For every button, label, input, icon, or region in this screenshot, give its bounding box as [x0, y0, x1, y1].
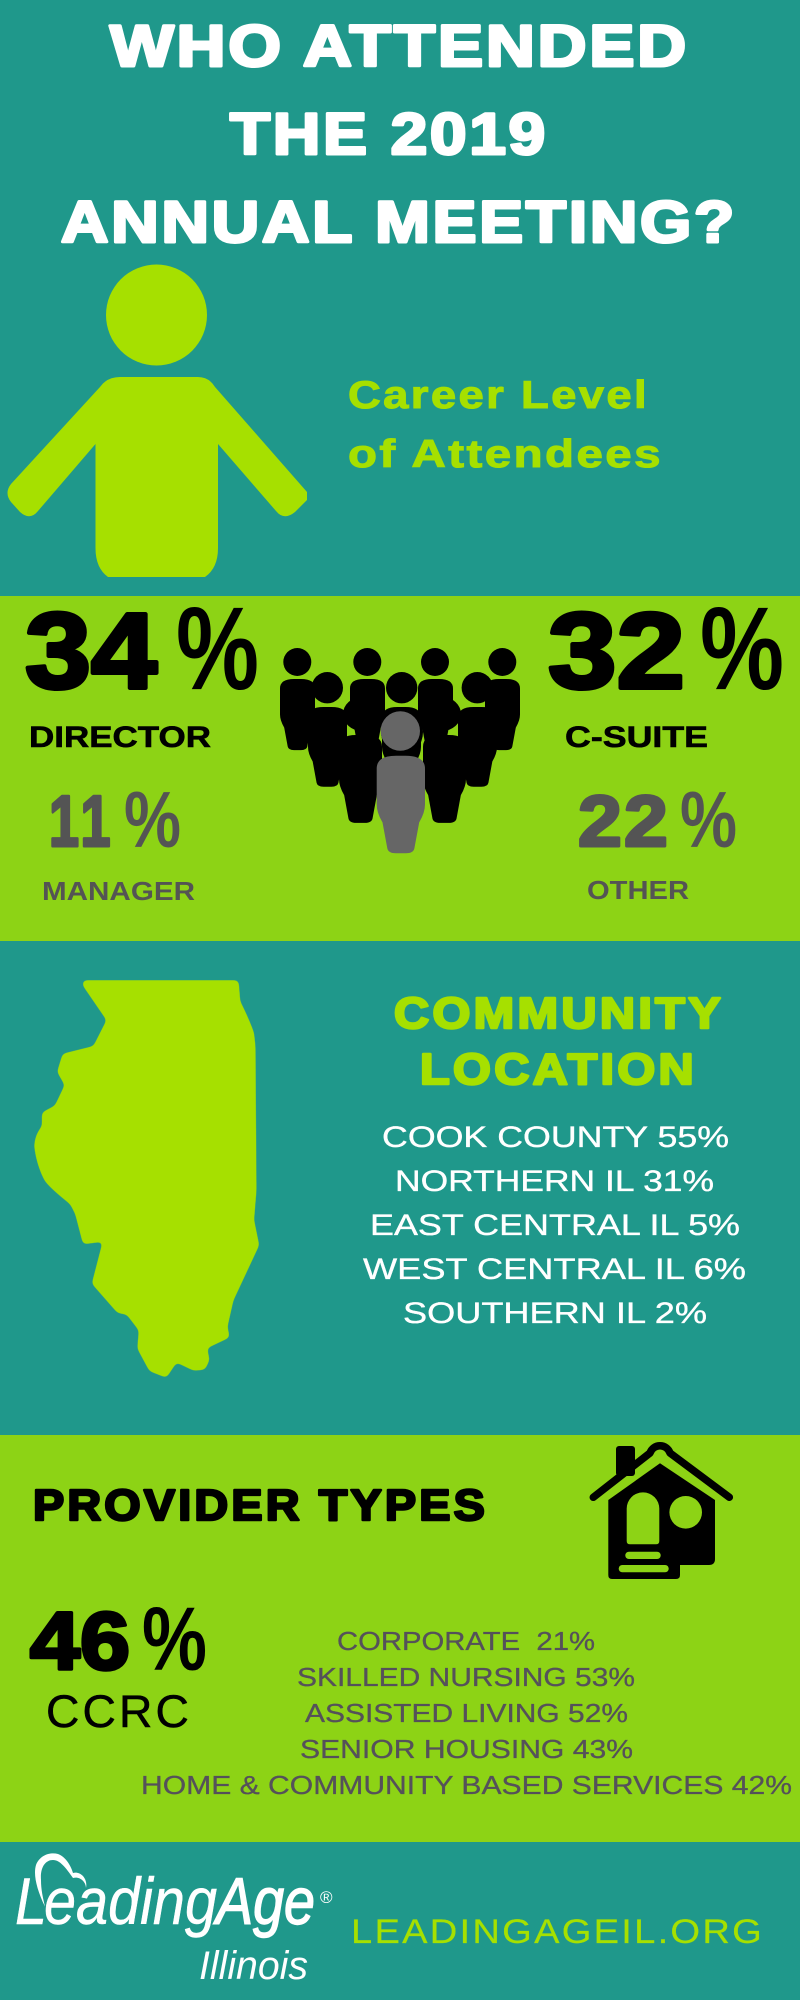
logo: LeadingAge Illinois: L	[15, 1864, 47, 1938]
website url: LEADINGAGEIL.ORG	[351, 1913, 764, 1951]
subheading: career level	[348, 374, 663, 476]
title	[61, 14, 737, 255]
stat: manager	[42, 775, 195, 906]
title: WHO ATTENDED	[110, 14, 689, 79]
stat: other: %	[680, 775, 737, 864]
list: provider types	[141, 1626, 792, 1800]
list: regions: EAST CENTRAL IL 5%	[370, 1209, 740, 1242]
list: regions: WEST CENTRAL IL 6%	[363, 1253, 746, 1286]
stat: CCRC: CCRC	[46, 1686, 192, 1737]
stat: director: DIRECTOR	[29, 721, 211, 754]
logo: LeadingAge Illinois: Illinois	[199, 1944, 308, 1988]
list: regions: SOUTHERN IL 2%	[403, 1297, 707, 1330]
stat: manager: 11	[49, 782, 115, 862]
stat: other: OTHER	[587, 875, 689, 905]
list: regions: COOK COUNTY 55%	[382, 1121, 729, 1154]
panel: provider types	[0, 1435, 800, 1842]
list: regions: NORTHERN IL 31%	[395, 1165, 714, 1198]
icon: house	[593, 1446, 729, 1579]
list: provider types: CORPORATE 21%	[337, 1626, 595, 1656]
stat: director: 34	[25, 590, 157, 711]
map: Illinois	[36, 982, 258, 1376]
subheading: career level: Career Level	[348, 374, 649, 417]
heading: community location	[394, 989, 724, 1094]
panel: community location	[0, 941, 800, 1435]
subheading: career level: of Attendees	[348, 433, 663, 476]
icon: person with arms out	[8, 264, 307, 577]
list: provider types: ASSISTED LIVING 52%	[305, 1698, 628, 1728]
stat: c-suite: 32	[548, 590, 685, 711]
heading: community location: COMMUNITY	[394, 989, 724, 1038]
panel: header	[0, 0, 800, 596]
stat: c-suite	[548, 583, 784, 754]
stat: director	[25, 583, 259, 754]
list: provider types: HOME & COMMUNITY BASED SERVICES 42%	[141, 1770, 792, 1800]
panel: career level stats	[0, 583, 800, 941]
title: ANNUAL MEETING?	[61, 190, 737, 255]
list: regions	[363, 1121, 746, 1330]
stat: CCRC	[30, 1590, 207, 1737]
stat: director: %	[176, 583, 259, 715]
title: THE 2019	[230, 102, 548, 167]
list: provider types: SENIOR HOUSING 43%	[300, 1734, 633, 1764]
logo: LeadingAge Illinois: eading	[44, 1864, 217, 1938]
logo: LeadingAge Illinois: Age	[213, 1864, 315, 1938]
heading: community location: LOCATION	[420, 1045, 697, 1094]
panel: footer	[0, 1842, 800, 2000]
list: provider types: SKILLED NURSING 53%	[297, 1662, 635, 1692]
logo: LeadingAge Illinois	[15, 1853, 333, 1988]
heading: provider types: PROVIDER TYPES	[33, 1481, 488, 1530]
stat: other	[578, 775, 737, 905]
stat: c-suite: C-SUITE	[565, 721, 708, 754]
stat: CCRC: 46	[30, 1596, 130, 1687]
stat: manager: MANAGER	[42, 876, 195, 906]
logo: LeadingAge Illinois: ®	[320, 1888, 333, 1907]
stat: CCRC: %	[142, 1590, 207, 1690]
icon: crowd of people	[280, 648, 520, 853]
stat: other: 22	[578, 782, 670, 862]
stat: manager: %	[124, 775, 181, 864]
